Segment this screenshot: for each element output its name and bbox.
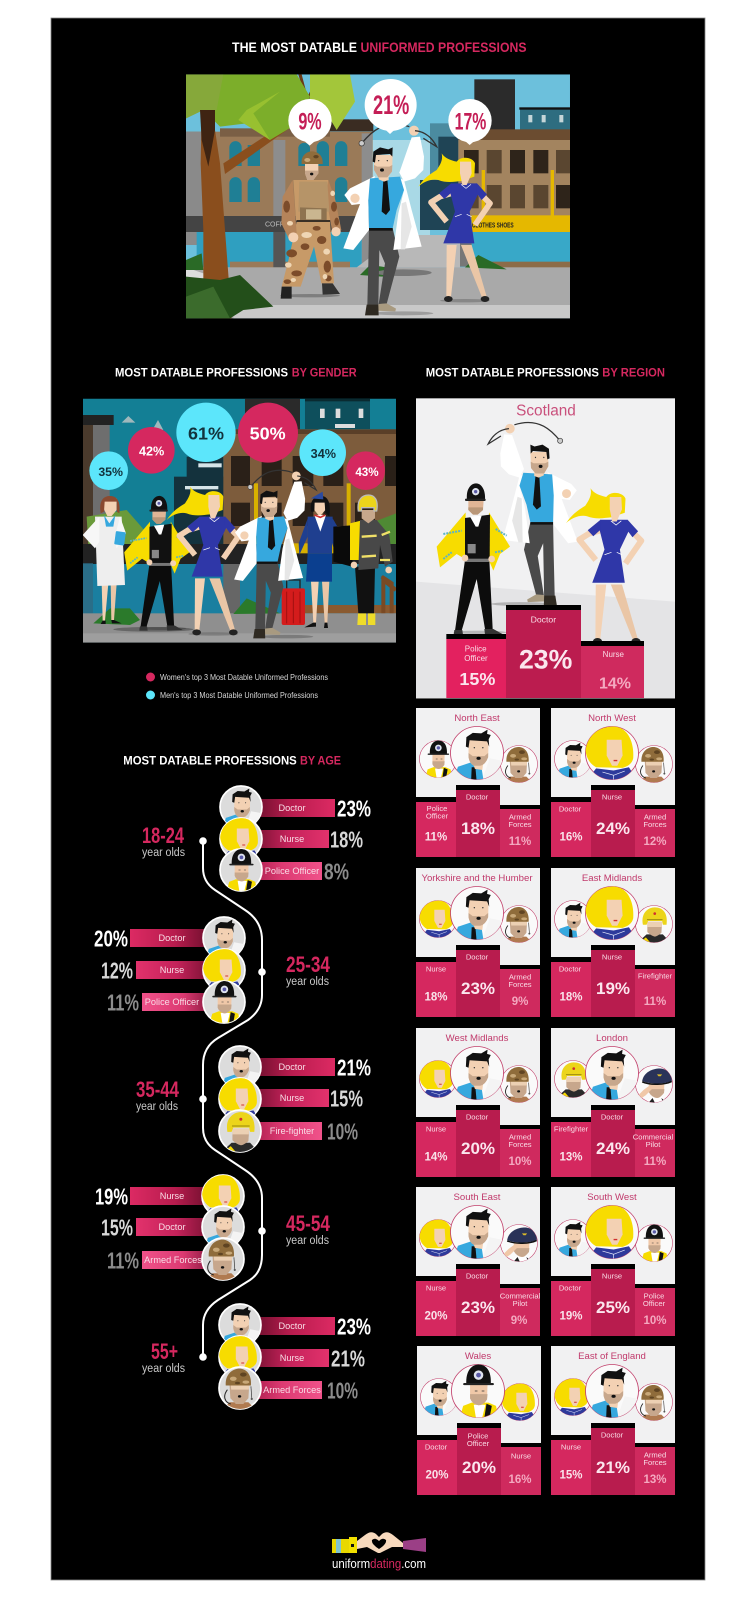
values: 23% (461, 979, 495, 998)
heading: by region: BY REGION (602, 366, 665, 380)
callout: doctor 21%: 21% (373, 90, 409, 120)
bar: nurse 15%: Nurse (280, 1093, 304, 1103)
bubble: 34% men (299, 429, 346, 476)
bar: armed forces 11%: 11% (107, 1248, 139, 1274)
icon: commercial pilot (500, 1224, 538, 1262)
values: 10% (508, 1156, 532, 1168)
podium: nurse 14%: Nurse (603, 650, 625, 659)
values: 11% (644, 996, 666, 1008)
values: 20% (462, 1458, 496, 1477)
character: nurse (167, 487, 238, 636)
values: Firefighter (554, 1124, 589, 1134)
values: 16% (508, 1474, 532, 1486)
timeline line (203, 841, 262, 1357)
values: Forces (643, 1458, 667, 1467)
values: Firefighter (638, 972, 673, 981)
values: 18% (424, 992, 448, 1004)
values: 21% (596, 1458, 630, 1477)
callout: armed forces 9% (288, 99, 332, 146)
bar: fire-fighter 10%: Fire-fighter (270, 1126, 314, 1136)
bar: doctor 15%: Doctor (158, 1222, 186, 1232)
bar: doctor 21% (255, 1054, 371, 1080)
panel: East Midlands (551, 868, 675, 1017)
storefront sign: clothes shoes: CLOTHES SHOES (472, 220, 514, 229)
age label: year olds (142, 847, 185, 859)
values: 9% (511, 1315, 527, 1327)
values: Doctor (466, 793, 489, 802)
icon: nurse (586, 1206, 638, 1258)
bar: doctor 21%: Doctor (278, 1062, 306, 1072)
values (554, 1113, 674, 1168)
region name: East Midlands (582, 873, 642, 884)
values: 19% (559, 1310, 583, 1322)
icon: nurse (420, 1220, 456, 1256)
region name: London (596, 1033, 628, 1044)
values: Forces (508, 1140, 532, 1149)
region name: Yorkshire and the Humber (421, 873, 533, 884)
icon: doctor (450, 726, 504, 780)
region name: North East (454, 713, 500, 724)
podium: doctor 23%: 23% (519, 645, 572, 675)
bar: fire-fighter 10% (255, 1118, 358, 1144)
bar: nurse 18%: 18% (330, 826, 363, 852)
age label: 55+ (151, 1339, 178, 1364)
icon: nurse (586, 726, 638, 780)
callout: nurse 17%: 17% (455, 108, 486, 135)
values (425, 1432, 532, 1486)
values (424, 1272, 541, 1327)
values (424, 1113, 532, 1168)
age label (286, 1211, 331, 1247)
panel: Wales (417, 1346, 541, 1495)
callout: doctor 21% (365, 79, 417, 134)
bar: doctor 23% (255, 796, 371, 822)
icon: doctor (450, 1206, 504, 1258)
bar: nurse 15%: 15% (330, 1086, 363, 1112)
bubble: 35% men (89, 451, 128, 490)
icon: nurse (202, 1175, 244, 1217)
bar: nurse 19%: 19% (95, 1184, 128, 1210)
title (232, 39, 526, 55)
age label (136, 1077, 180, 1113)
values: Nurse (511, 1452, 531, 1461)
bar: armed forces 10% (255, 1378, 358, 1404)
values: Armed (644, 1450, 666, 1460)
values: Doctor (601, 1431, 624, 1440)
values: 9% (512, 996, 528, 1008)
icon: armed forces (636, 1384, 672, 1420)
bar: armed forces 10%: Armed Forces (263, 1385, 321, 1395)
panel: South East (416, 1187, 541, 1336)
podium: police officer 15% (446, 634, 506, 698)
bar: nurse 12%: Nurse (160, 965, 184, 975)
bubble: 34% men: 34% (311, 447, 336, 461)
age group: 45-54 (95, 1175, 331, 1280)
bar: nurse 19% (95, 1184, 210, 1210)
icon: doctor (219, 1304, 261, 1346)
region name: North West (588, 713, 636, 724)
panel: hero street scene with top three professions (186, 74, 570, 318)
icon: armed forces (500, 746, 538, 782)
character: doctor (234, 470, 316, 638)
bar: police officer 11% (107, 990, 210, 1016)
values: Commercial (500, 1292, 541, 1300)
values: Nurse (602, 953, 622, 962)
values: Armed (509, 812, 531, 822)
icon: armed forces (500, 1066, 538, 1102)
character: doctor (488, 422, 578, 606)
values: Forces (643, 820, 667, 829)
icon: doctor (220, 786, 262, 828)
bar: nurse 12% (101, 958, 210, 984)
icon: doctor (554, 1220, 592, 1256)
values (424, 953, 532, 1008)
age group: 35-44 (136, 1046, 371, 1152)
bar: doctor 23% (255, 1314, 371, 1340)
character: police officer (437, 483, 510, 635)
values: 18% (461, 819, 495, 838)
character: firefighter (333, 495, 393, 625)
values: Doctor (466, 1272, 489, 1281)
bubble: 42% women (128, 427, 175, 474)
bar: armed forces 11% (107, 1248, 210, 1274)
values: 20% (424, 1310, 448, 1322)
panel: gender scene (83, 399, 396, 643)
bar: doctor 23%: 23% (337, 1314, 371, 1340)
icon: armed forces (636, 746, 672, 782)
panel: West Midlands (416, 1028, 540, 1177)
values: Armed (644, 812, 666, 822)
bubble: 61% men: 61% (188, 423, 224, 443)
icon: nurse (420, 1060, 456, 1098)
title: THE MOST DATABLE (232, 39, 357, 55)
values: Officer (643, 1299, 666, 1308)
wordmark: uniformdating.com (332, 1557, 426, 1571)
values: Armed (509, 972, 531, 982)
heading: by gender: BY GENDER (292, 366, 357, 380)
panel: Scotland (416, 398, 675, 698)
age label: year olds (286, 976, 329, 988)
legend (146, 672, 328, 700)
icon: armed forces (500, 906, 538, 942)
values (559, 793, 667, 848)
bar: doctor 15% (101, 1214, 210, 1240)
bar: nurse 18%: Nurse (280, 834, 304, 844)
values: 20% (425, 1470, 449, 1482)
values: 11% (509, 836, 531, 848)
logo: uniformdating.com (332, 1532, 426, 1571)
podium: nurse 14% (581, 641, 644, 698)
icon: doctor (420, 1378, 458, 1416)
values: Doctor (466, 953, 489, 962)
values: Police (468, 1432, 488, 1441)
icon: doctor (202, 1206, 244, 1248)
values: 25% (596, 1298, 630, 1317)
icon: police officer (203, 981, 245, 1023)
heading: by age: BY AGE (300, 754, 341, 768)
age label: 45-54 (286, 1211, 331, 1236)
bubble: 61% men (176, 403, 236, 462)
panel: North West (551, 708, 675, 857)
region name: East of England (578, 1351, 646, 1362)
region name: South West (587, 1192, 637, 1203)
character: nurse (418, 153, 490, 302)
values: Nurse (426, 964, 446, 974)
bar: doctor 15%: 15% (101, 1214, 133, 1240)
region name: Scotland: Scotland (516, 402, 576, 419)
icon: doctor (586, 1364, 638, 1418)
icon: doctor (203, 917, 245, 959)
icon: police officer (636, 1224, 672, 1262)
values: Doctor (559, 964, 582, 974)
bar: police officer 8%: 8% (324, 858, 349, 884)
values: Nurse (602, 1272, 622, 1281)
storefront sign: coffee: COFFEE (265, 222, 294, 229)
bar: nurse 18% (255, 826, 363, 852)
values (559, 1431, 667, 1486)
values: Officer (426, 812, 449, 821)
podium: police officer 15%: Officer (464, 654, 488, 663)
character: nurse (566, 488, 641, 645)
values: Doctor (601, 1113, 624, 1122)
bubble: 50% women (238, 403, 298, 463)
age label: year olds (286, 1235, 329, 1247)
values: 19% (596, 979, 630, 998)
values: Officer (467, 1439, 490, 1448)
age group: 25-34 (94, 917, 331, 1023)
region name: South East (454, 1192, 501, 1203)
values: 13% (643, 1474, 667, 1486)
icon: nurse (219, 1336, 261, 1378)
bar: nurse 15% (255, 1086, 363, 1112)
icon: firefighter (219, 1110, 261, 1152)
icon: nurse (502, 1384, 538, 1420)
title: UNIFORMED PROFESSIONS (360, 39, 526, 55)
bar: doctor 20%: 20% (94, 926, 128, 952)
values: Pilot (513, 1299, 528, 1308)
heading: by age: MOST DATABLE PROFESSIONS (123, 754, 297, 768)
character: police officer (124, 496, 189, 631)
values: Pilot (646, 1140, 661, 1149)
bar: doctor 21%: 21% (337, 1054, 371, 1080)
values: Doctor (559, 804, 582, 814)
bar: armed forces 11%: Armed Forces (144, 1255, 202, 1265)
bar: doctor 20% (94, 926, 210, 952)
age label (286, 952, 331, 988)
values: 14% (424, 1152, 448, 1164)
bar: nurse 21%: Nurse (280, 1353, 304, 1363)
character: female doctor (83, 496, 126, 624)
icon: nurse (219, 1078, 261, 1120)
values (559, 1272, 667, 1327)
panel: East of England (551, 1346, 675, 1495)
icon: police officer (420, 740, 456, 778)
character: flight attendant (298, 492, 338, 628)
values: Police (644, 1292, 664, 1300)
icon: nurse (586, 886, 638, 940)
panel: South West (551, 1187, 675, 1336)
values: 16% (559, 832, 583, 844)
values: Doctor (466, 1113, 489, 1122)
values: 15% (559, 1470, 583, 1482)
podium: police officer 15%: Police (465, 644, 487, 653)
age label (142, 1339, 185, 1375)
icon: police officer (452, 1364, 504, 1418)
region name: Wales (465, 1351, 491, 1362)
icon: red suitcase (282, 580, 305, 625)
icon: doctor (450, 886, 504, 940)
values: Forces (508, 980, 532, 989)
bubble: 42% women: 42% (139, 445, 164, 459)
icon: nurse (203, 949, 245, 991)
icon: doctor (450, 1046, 504, 1100)
callout: nurse 17% (448, 99, 492, 145)
values: Doctor (425, 1442, 448, 1452)
bar: police officer 11%: 11% (107, 990, 139, 1016)
icon: doctor (586, 1046, 638, 1100)
bar: doctor 20%: Doctor (158, 933, 186, 943)
bubble: 35% men: 35% (98, 465, 123, 479)
bar: nurse 19%: Nurse (160, 1191, 184, 1201)
bubble: 43% women (346, 451, 385, 490)
bar: fire-fighter 10%: 10% (327, 1118, 358, 1144)
region name: West Midlands (446, 1033, 509, 1044)
age group: 18-24 (142, 786, 371, 891)
panel: London (551, 1028, 675, 1177)
icon: police officer (220, 849, 262, 891)
character: armed forces (280, 151, 341, 299)
values: 11% (425, 832, 447, 844)
values: Forces (508, 820, 532, 829)
panel: North East (416, 708, 540, 857)
bar: nurse 21% (255, 1346, 365, 1372)
values: Nurse (426, 1124, 446, 1134)
panel: Yorkshire and the Humber (416, 868, 540, 1017)
values: Nurse (561, 1442, 581, 1452)
heading: by region: MOST DATABLE PROFESSIONS (426, 366, 599, 380)
icon: nurse (554, 1378, 592, 1416)
values: Nurse (602, 793, 622, 802)
bar: nurse 21%: 21% (331, 1346, 365, 1372)
bar: nurse 12%: 12% (101, 958, 133, 984)
bar: doctor 23%: Doctor (278, 1321, 306, 1331)
age label: 25-34 (286, 952, 331, 977)
values: 10% (643, 1315, 667, 1327)
age label (142, 823, 185, 859)
callout: armed forces 9%: 9% (298, 108, 322, 135)
character: doctor (343, 124, 437, 315)
icon: doctor (554, 740, 592, 778)
bar: doctor 23%: Doctor (278, 803, 306, 813)
bar: armed forces 10%: 10% (327, 1378, 358, 1404)
bubble: 50% women: 50% (250, 424, 286, 444)
values: 23% (461, 1298, 495, 1317)
values: 11% (644, 1156, 666, 1168)
icon: firefighter (636, 906, 672, 942)
values (425, 793, 532, 848)
podium: doctor 23%: Doctor (531, 614, 556, 624)
icon: armed forces (202, 1238, 244, 1280)
icon: firefighter (554, 1060, 592, 1098)
values: 13% (559, 1152, 583, 1164)
legend: Men's top 3 Most Datable Uniformed Professions (160, 690, 318, 700)
icon: armed forces (219, 1367, 261, 1409)
values (559, 953, 673, 1008)
bubble: 43% women: 43% (355, 466, 379, 479)
values: 20% (461, 1139, 495, 1158)
values: Police (427, 804, 447, 813)
podium: police officer 15%: 15% (459, 669, 495, 689)
bar: police officer 8% (255, 858, 349, 884)
icon: commercial pilot (636, 1066, 672, 1102)
age label: year olds (136, 1101, 178, 1113)
icon: nurse (420, 900, 456, 938)
bar: doctor 23%: 23% (337, 796, 371, 822)
values: Armed (509, 1132, 531, 1142)
podium: doctor 23% (506, 605, 581, 698)
bar: police officer 8%: Police Officer (265, 866, 319, 876)
values: Doctor (559, 1284, 582, 1292)
values: 12% (643, 836, 667, 848)
values: Nurse (426, 1284, 446, 1292)
bar: police officer 11%: Police Officer (145, 997, 199, 1007)
values: Commercial (633, 1132, 674, 1142)
values: 24% (596, 1139, 630, 1158)
values: 24% (596, 819, 630, 838)
icon: heart hands (332, 1532, 426, 1553)
age label: 18-24 (142, 823, 185, 848)
age group: 55+ (142, 1304, 371, 1409)
age label: 35-44 (136, 1077, 180, 1102)
heading: by gender: MOST DATABLE PROFESSIONS (115, 366, 288, 380)
icon: doctor (554, 900, 592, 938)
icon: doctor (219, 1046, 261, 1088)
podium: nurse 14%: 14% (599, 676, 631, 693)
age label: year olds (142, 1363, 185, 1375)
legend: Women's top 3 Most Datable Uniformed Professions (160, 672, 328, 682)
values: 18% (559, 992, 583, 1004)
icon: nurse (220, 818, 262, 860)
